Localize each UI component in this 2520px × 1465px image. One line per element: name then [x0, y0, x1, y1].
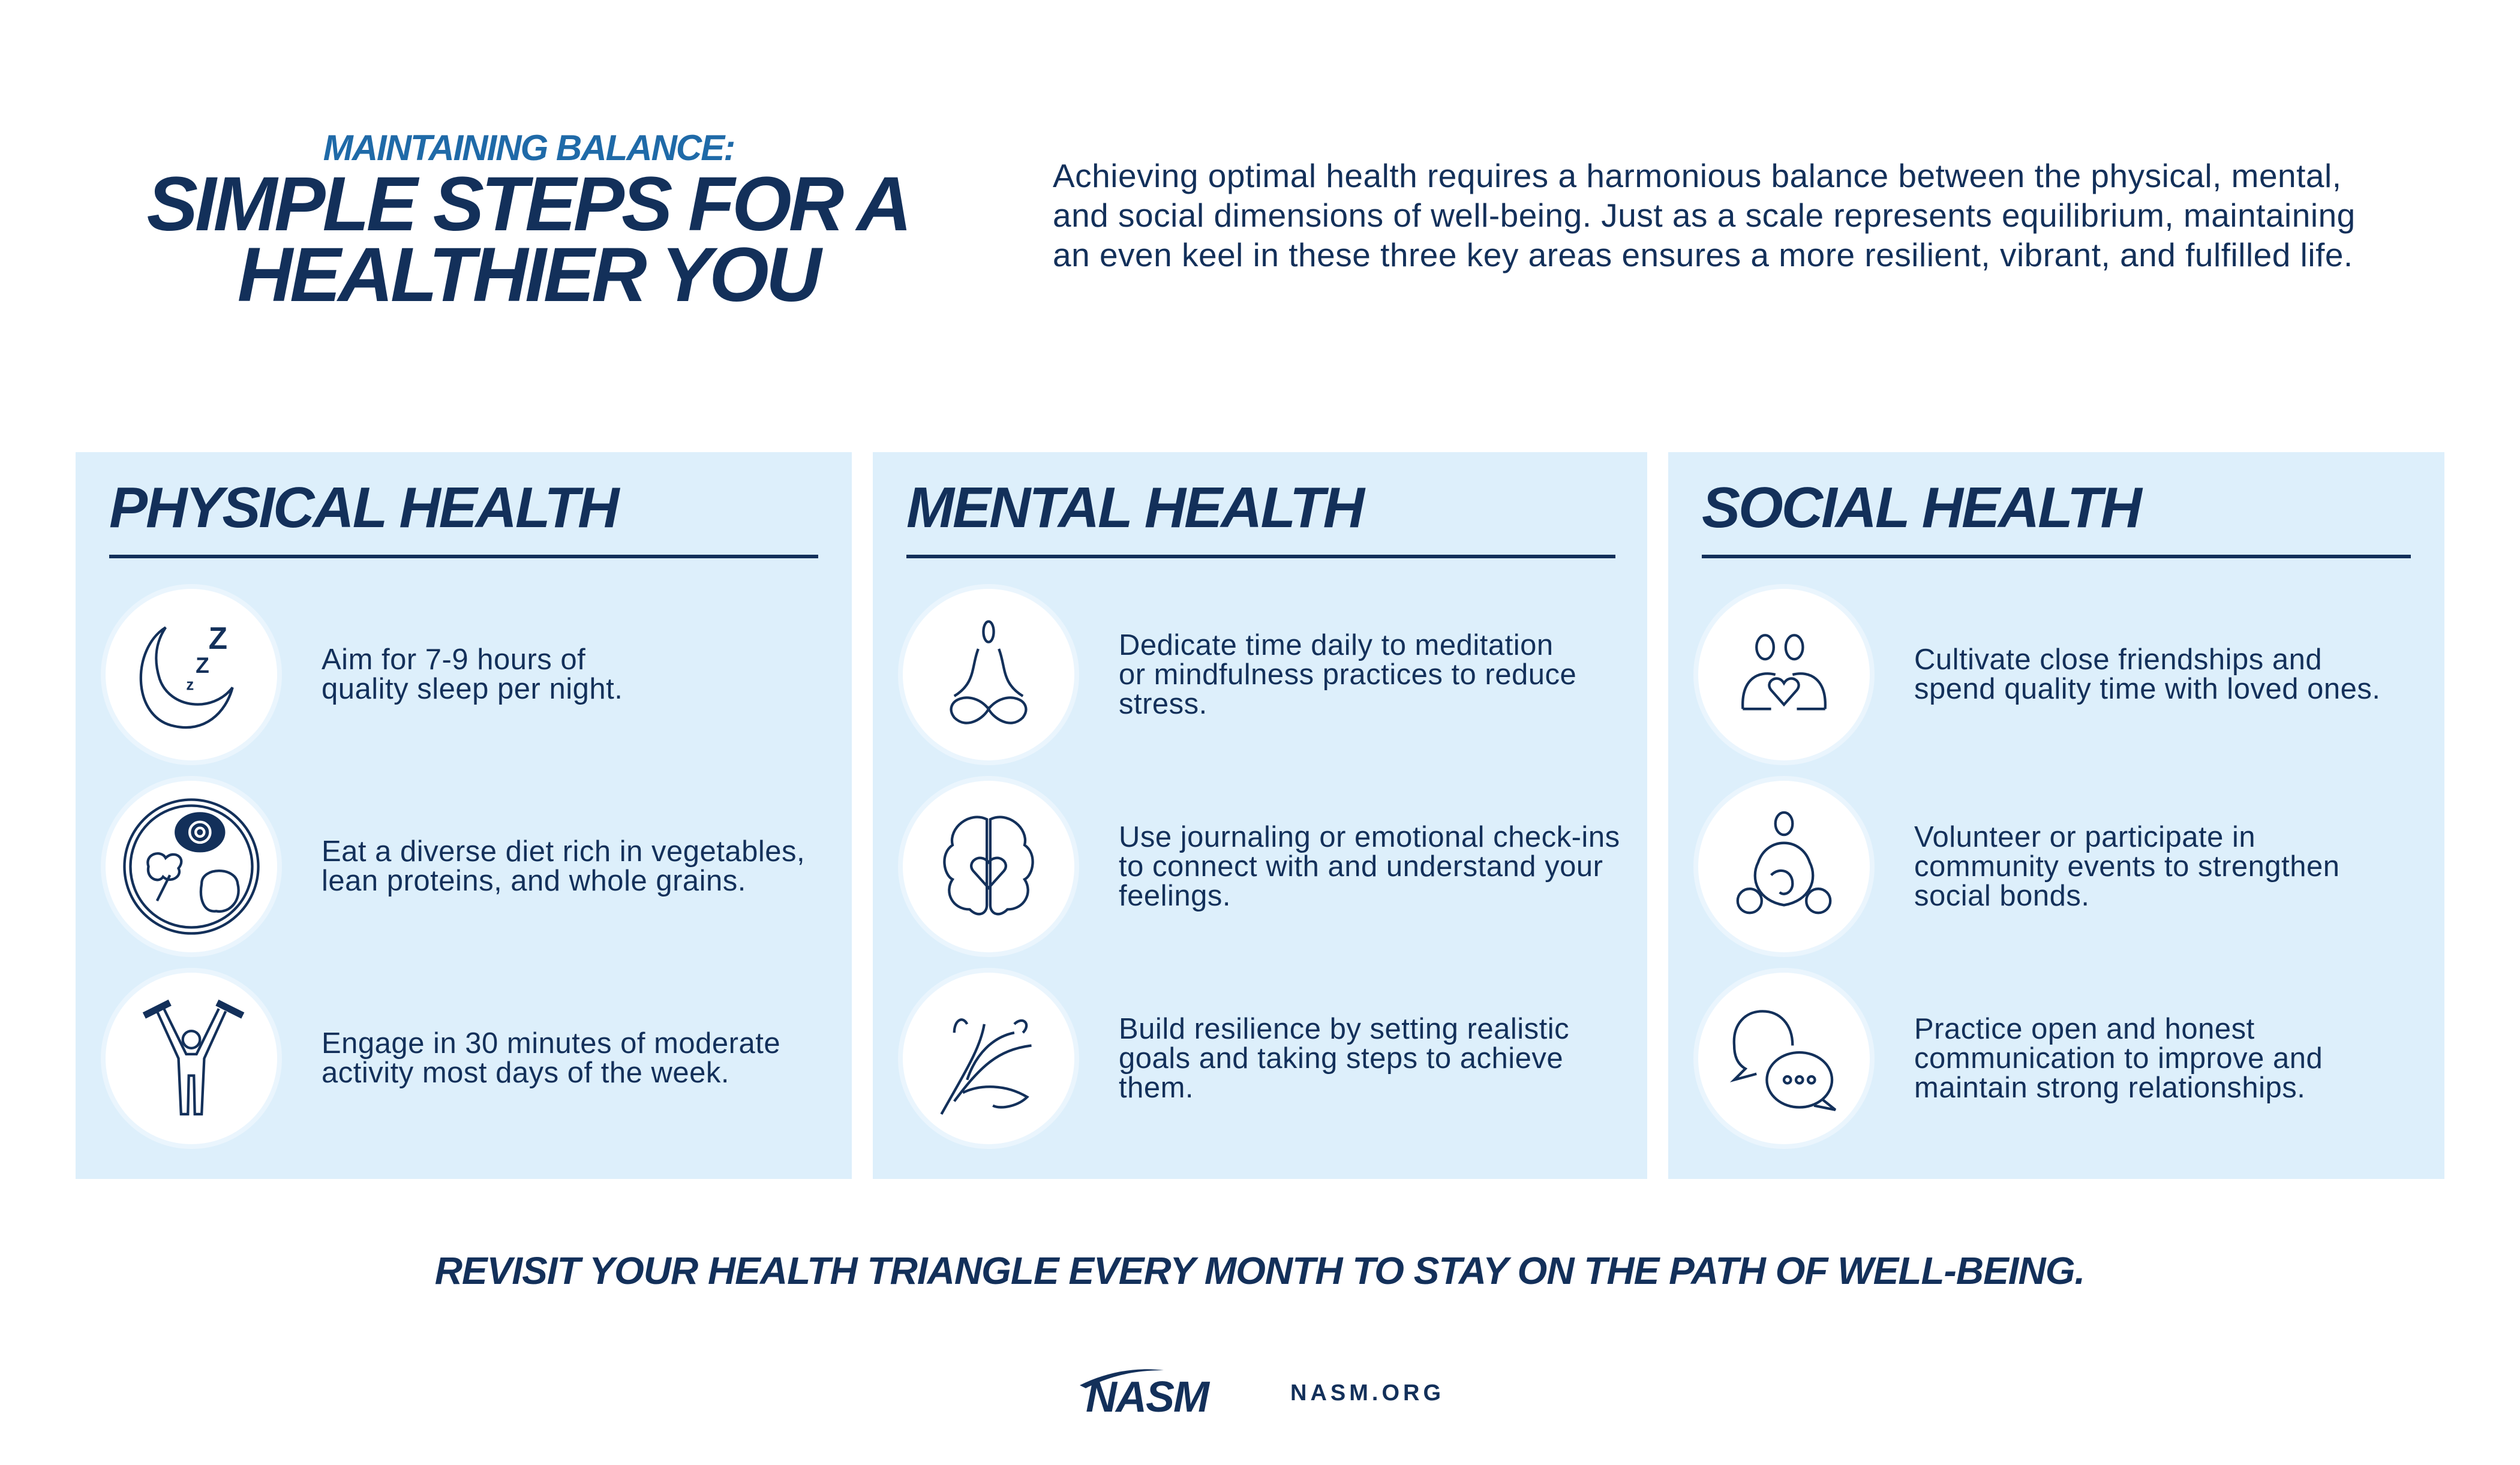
item: resilience: [898, 968, 1569, 1149]
heading: physical: PHYSICAL HEALTH: [109, 476, 618, 540]
text: [322, 835, 805, 897]
item: meditation: [898, 584, 1576, 765]
text: communication to improve and: [1914, 1042, 2323, 1075]
icon: moon: Z: [209, 621, 227, 655]
text: Eat a diverse diet rich in vegetables,: [322, 835, 805, 868]
text: Dedicate time daily to meditation: [1119, 628, 1554, 661]
text: [1914, 1012, 2323, 1103]
text: Build resilience by setting realistic: [1119, 1012, 1569, 1045]
heading: social: SOCIAL HEALTH: [1702, 476, 2140, 540]
panel: social health: [1668, 452, 2444, 1179]
text: community events to strengthen: [1914, 850, 2340, 883]
text: [1119, 628, 1576, 720]
text: [1119, 1012, 1569, 1103]
text: spend quality time with loved ones.: [1914, 673, 2380, 705]
text: Volunteer or participate in: [1914, 820, 2255, 853]
text: [1914, 820, 2340, 912]
icon: speech bubbles: [1698, 973, 1870, 1144]
icon: community: [1698, 781, 1870, 952]
title: HEALTHIER YOU: [238, 232, 818, 318]
text: [1914, 643, 2380, 705]
text: activity most days of the week.: [322, 1057, 729, 1089]
text: lean proteins, and whole grains.: [322, 865, 746, 897]
icon: sprouting plant: [903, 973, 1074, 1144]
item: sleep: [101, 584, 623, 765]
text: Use journaling or emotional check-ins: [1119, 820, 1620, 853]
website: NASM.ORG: [1290, 1380, 1444, 1406]
icon: brain heart: [903, 781, 1074, 952]
item: communication: [1693, 968, 2323, 1149]
icon: moon: Z: [196, 652, 209, 678]
title: [147, 161, 909, 318]
text: Cultivate close friendships and: [1914, 643, 2322, 676]
text: or mindfulness practices to reduce: [1119, 658, 1576, 691]
text: [322, 1027, 780, 1089]
panel: physical health: [76, 452, 852, 1179]
text: feelings.: [1119, 879, 1231, 912]
text: Aim for 7-9 hours of: [322, 643, 585, 676]
text: them.: [1119, 1071, 1194, 1103]
item: diet: [101, 776, 805, 957]
text: [1119, 820, 1620, 912]
icon: two people heart: [1698, 589, 1870, 760]
panel: mental health: [873, 452, 1647, 1179]
footer tagline: REVISIT YOUR HEALTH TRIANGLE EVERY MONTH TO STAY ON THE PATH OF WELL-BEING.: [435, 1249, 2085, 1292]
text: quality sleep per night.: [322, 673, 623, 705]
intro paragraph: [1053, 157, 2356, 273]
item: friendships: [1693, 584, 2380, 765]
title: SIMPLE STEPS FOR A: [147, 161, 909, 247]
text: [322, 643, 623, 705]
intro paragraph: and social dimensions of well-being. Just as a scale represents equilibrium, maintaining: [1053, 197, 2356, 234]
text: Engage in 30 minutes of moderate: [322, 1027, 780, 1060]
icon: moon: z: [186, 677, 194, 694]
item: community: [1693, 776, 2340, 957]
icon: meditation: [903, 589, 1074, 760]
heading: mental: MENTAL HEALTH: [906, 476, 1363, 540]
icon: plate: [106, 781, 277, 952]
text: social bonds.: [1914, 879, 2090, 912]
icon: moon: [106, 589, 277, 760]
item: journaling: [898, 776, 1620, 957]
subtitle: MAINTAINING BALANCE:: [323, 128, 734, 168]
icon: person lifting: [106, 973, 277, 1144]
intro paragraph: Achieving optimal health requires a harmonious balance between the physical, mental,: [1053, 157, 2342, 194]
text: goals and taking steps to achieve: [1119, 1042, 1563, 1075]
text: to connect with and understand your: [1119, 850, 1603, 883]
intro paragraph: an even keel in these three key areas ensures a more resilient, vibrant, and fulfilled life.: [1053, 236, 2353, 273]
text: stress.: [1119, 687, 1208, 720]
text: maintain strong relationships.: [1914, 1071, 2305, 1103]
item: activity: [101, 968, 780, 1149]
text: Practice open and honest: [1914, 1012, 2255, 1045]
